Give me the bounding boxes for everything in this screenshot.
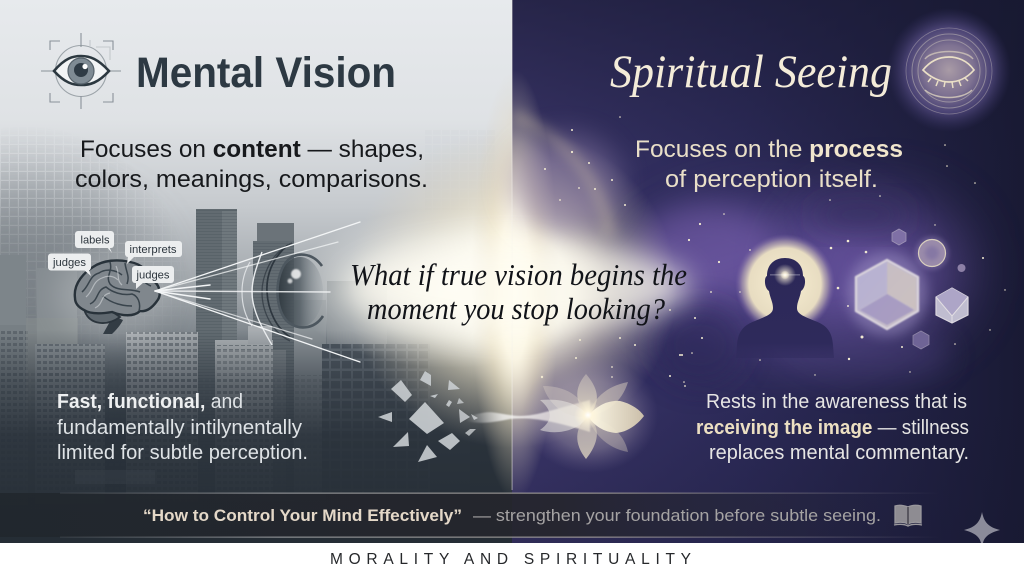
rays (155, 222, 360, 362)
text block: fast and functional (57, 390, 308, 464)
label: judges right: judges (135, 270, 170, 282)
text block: rests in awareness: Rests in the awareness that is (706, 390, 967, 413)
center light seam (290, 0, 690, 500)
recommendation text: — strengthen your foundation before subtle seeing. (473, 506, 881, 525)
central question (350, 258, 687, 326)
text block: fast and functional: fundamentally intilynentally (57, 416, 303, 439)
label: judges left: judges (52, 257, 87, 269)
illustration: fragments becoming a lotus (378, 357, 658, 473)
panel: spiritual seeing background (512, 0, 1024, 543)
text block: rests in awareness: replaces mental commentary. (709, 441, 969, 464)
text block: spiritual seeing focus: of perception itself. (665, 166, 878, 193)
illustration: floating crystals (847, 229, 968, 349)
central question: What if true vision begins the (350, 258, 687, 292)
label: labels: labels (80, 234, 110, 246)
icon: mental vision eye with focus brackets (41, 33, 121, 109)
footer caption band: MORALITY AND SPIRITUALITY (330, 551, 691, 568)
large crystal (847, 252, 927, 336)
star field (541, 116, 1006, 387)
text block: fast and functional: limited for subtle perception. (57, 441, 308, 464)
brain (57, 250, 167, 340)
text block: mental vision focus: Focuses on content — shapes, (80, 136, 424, 163)
text block: mental vision focus: colors, meanings, comparisons. (75, 166, 428, 193)
flowing stream (466, 400, 590, 432)
label: interprets: interprets (130, 244, 177, 256)
icon: closed eye in glowing rings (887, 8, 1011, 132)
shattered fragments (378, 371, 478, 462)
icon: open book (894, 505, 922, 526)
text block: fast and functional: Fast, functional, and (57, 390, 243, 413)
city skyline (0, 209, 512, 470)
nebula (635, 199, 965, 385)
footer banner (0, 492, 940, 538)
heading: mental vision: Mental Vision (136, 49, 396, 97)
sphere (915, 236, 949, 270)
small dot (958, 264, 966, 272)
heading: spiritual seeing: Spiritual Seeing (610, 46, 892, 98)
central question: moment you stop looking? (367, 292, 665, 326)
small hexagon top (892, 229, 906, 245)
illustration: brain with thought labels (48, 231, 182, 340)
third eye light (770, 264, 800, 286)
illustration: gaze rays and lens (155, 222, 360, 362)
footer caption band (0, 543, 1024, 572)
recommendation text (143, 506, 881, 525)
text block: rests in awareness (696, 390, 969, 464)
icon: four point sparkle (964, 512, 1000, 543)
recommendation text: “How to Control Your Mind Effectively” (143, 506, 462, 525)
small cube (936, 288, 968, 323)
silhouette (736, 258, 834, 358)
text block: rests in awareness: receiving the image — stillness (696, 416, 969, 439)
small hexagon bottom (913, 331, 929, 349)
text block: spiritual seeing focus (635, 136, 903, 193)
illustration: meditating silhouette with halo (735, 234, 835, 358)
text block: spiritual seeing focus: Focuses on the process (635, 136, 903, 163)
text block: mental vision focus (75, 136, 428, 193)
lotus (522, 357, 658, 473)
panel: mental vision background (0, 0, 512, 543)
lens (242, 243, 323, 345)
